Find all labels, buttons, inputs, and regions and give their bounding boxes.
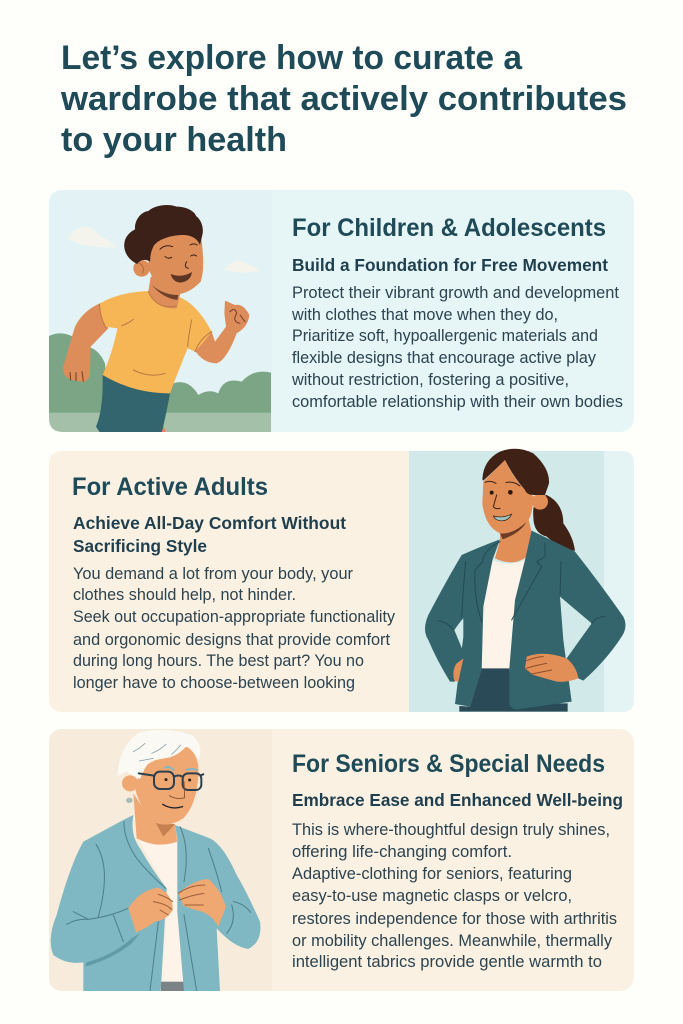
body text: children: without restriction, fostering a positive, (291, 370, 569, 389)
body text: adults: and orgonomic designs that provide comfort (73, 630, 390, 649)
body text: adults (73, 564, 395, 692)
title: Let’s explore how to curate a (61, 39, 523, 77)
body text: children: with clothes that move when they do, (291, 305, 558, 324)
body text: adults: Seek out occupation-appropriate functionality (73, 607, 395, 626)
body text: children (291, 283, 623, 411)
heading: adults: For Active Adults (72, 473, 268, 501)
title: to your health (61, 121, 287, 159)
illustration: senior buttoning cardigan (49, 729, 272, 992)
body text: seniors: This is where-thoughtful design truly shines, (292, 820, 610, 839)
body text: seniors: or mobility challenges. Meanwhile, thermally (292, 931, 612, 950)
body text: children: flexible designs that encourage active play (292, 348, 596, 367)
subheading: adults: Sacrificing Style (73, 536, 207, 556)
panel: seniors and special needs (49, 729, 634, 992)
title: wardrobe that actively contributes (60, 80, 627, 118)
body text: adults: during long hours. The best part? You no (73, 651, 364, 670)
body text: adults: longer have to choose-between looking (73, 673, 355, 692)
body text: seniors: easy-to-use magnetic clasps or velcro, (292, 886, 572, 905)
panel: children and adolescents (49, 190, 634, 433)
illustration: woman in blazer (409, 449, 625, 712)
body text: adults: You demand a lot from your body, your (73, 564, 353, 583)
body text: seniors: offering life-changing comfort. (292, 842, 512, 861)
illustration: running child (49, 190, 272, 433)
subheading: adults (73, 513, 346, 556)
panel: active adults (49, 449, 634, 712)
body text: children: Priaritize soft, hypoallergenic materials and (292, 326, 598, 345)
body text: seniors: Adaptive-clothing for seniors, featuring (292, 864, 572, 883)
body text: children: Protect their vibrant growth and development (292, 283, 619, 302)
heading: children: For Children & Adolescents (292, 214, 606, 242)
subheading: adults: Achieve All-Day Comfort Without (73, 513, 346, 533)
body text: adults: clothes should help, not hinder. (73, 585, 296, 604)
body text: children: comfortable relationship with their own bodies (292, 392, 623, 411)
body text: seniors: restores independence for those with arthritis (292, 909, 617, 928)
body text: seniors: intelligent tabrics provide gentle warmth to (292, 952, 602, 971)
body text: seniors (292, 820, 617, 971)
title (60, 39, 627, 159)
subheading: seniors: Embrace Ease and Enhanced Well-being (292, 790, 623, 810)
heading: seniors: For Seniors & Special Needs (292, 750, 605, 778)
subheading: children: Build a Foundation for Free Movement (292, 255, 608, 275)
